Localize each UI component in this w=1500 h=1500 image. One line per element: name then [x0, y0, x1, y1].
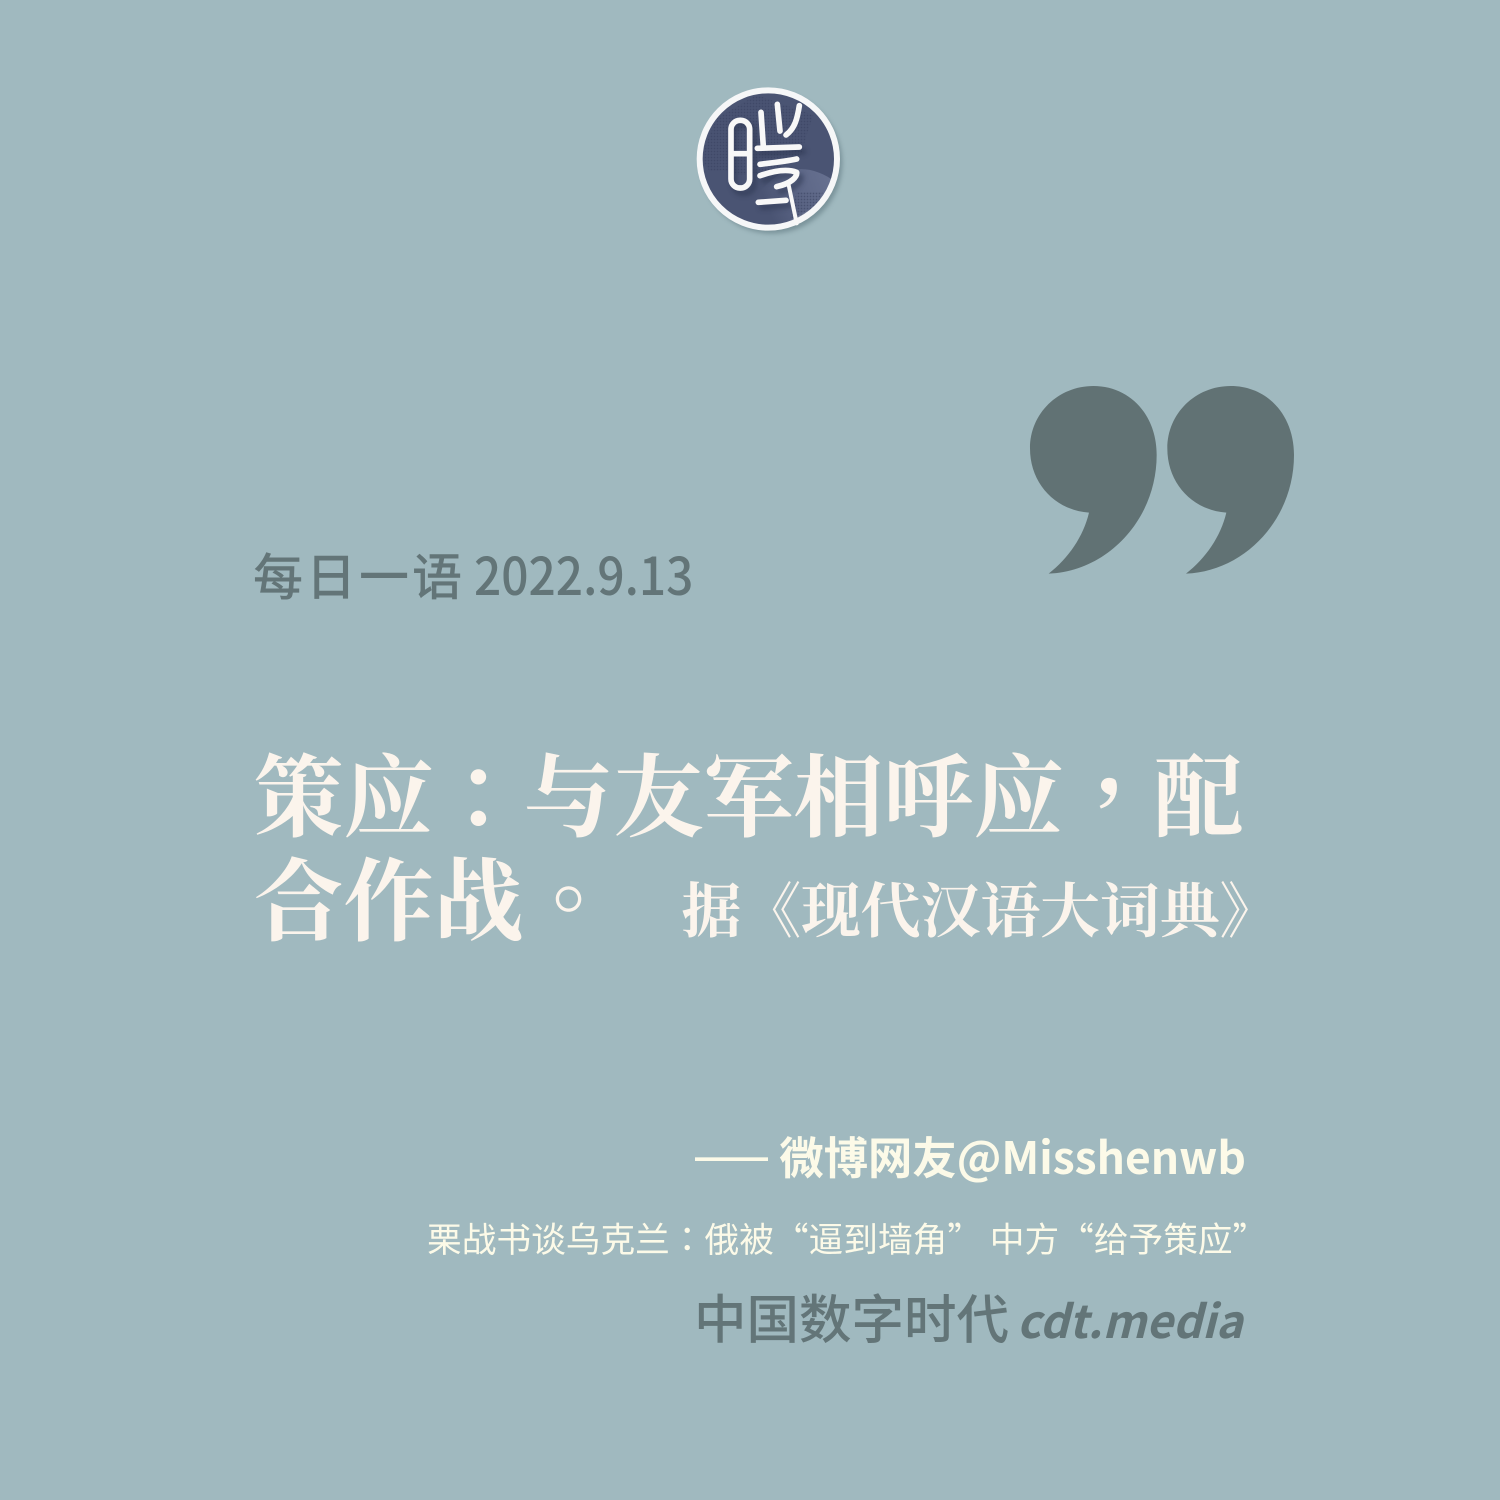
- quote text: 据《现代汉语大词典》: [682, 864, 1279, 950]
- brand footer: [694, 1278, 1244, 1354]
- attribution dash: ——: [695, 1136, 768, 1177]
- icon: round seal logo: [696, 87, 844, 236]
- quote line 2 with source: 合作战。: [254, 829, 614, 959]
- quote text: [254, 725, 1279, 959]
- article title: 栗战书谈乌克兰：俄被“逼到墙角” 中方“给予策应”: [427, 1212, 1267, 1262]
- date heading: 2022.9.13: [474, 535, 694, 610]
- brand footer: 中国数字时代: [694, 1278, 1009, 1354]
- date heading: 每日一语: [253, 538, 465, 610]
- quote line 2 with source: [254, 829, 1279, 959]
- attribution name: 微博网友@Misshenwb: [779, 1123, 1246, 1187]
- attribution: [695, 1123, 1246, 1187]
- brand footer: cdt.media: [1017, 1286, 1243, 1352]
- quote line 1: 策应：与友军相呼应，配: [254, 725, 1244, 855]
- date heading: [253, 535, 694, 610]
- icon: closing quotation mark: [1030, 386, 1294, 574]
